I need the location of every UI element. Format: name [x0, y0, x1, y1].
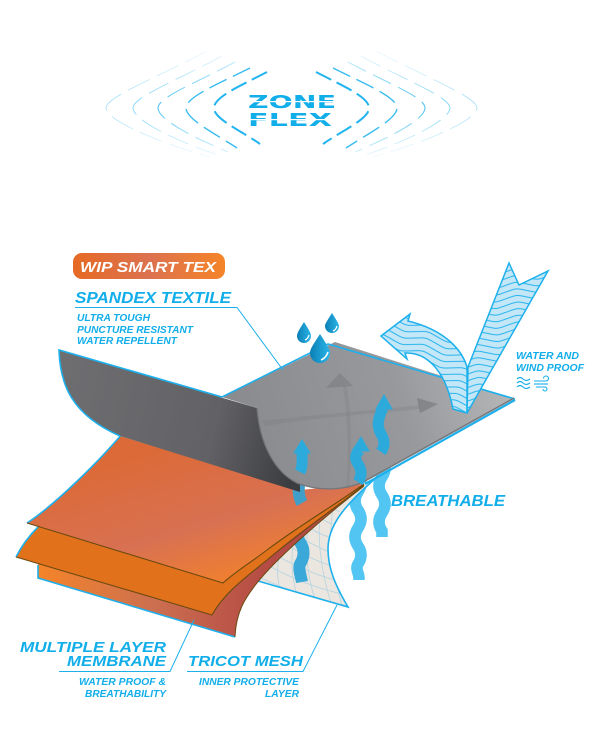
layer: tricot mesh — [255, 477, 377, 607]
logo rings left — [106, 51, 267, 157]
layer: lower membrane — [38, 486, 364, 637]
arrow: incoming arm — [467, 263, 548, 413]
label: spandex textile: SPANDEX TEXTILE — [75, 290, 232, 307]
waves below fabric — [355, 459, 385, 580]
label: multiple layer membrane: MULTIPLE LAYER — [20, 639, 166, 656]
label: tricot mesh: TRICOT MESH — [188, 653, 304, 670]
shadow arrows on sheet — [262, 373, 438, 488]
label: multiple layer membrane: BREATHABILITY — [85, 689, 167, 700]
water and wind proof arrow — [381, 263, 548, 413]
fabric layers — [16, 342, 515, 637]
arrow: middle on sheet — [352, 437, 369, 482]
logo wordmark — [246, 92, 338, 131]
arrow: horizontal shadow — [262, 398, 438, 426]
label: tricot mesh: LAYER — [265, 689, 300, 700]
label: water and wind proof: WIND PROOF — [516, 363, 585, 374]
label: multiple layer membrane: WATER PROOF & — [79, 677, 166, 688]
layer: spandex main sheet — [222, 342, 515, 489]
layer: top membrane — [27, 434, 364, 583]
water drops — [297, 313, 339, 363]
wave: under sheet right — [379, 459, 385, 537]
layer: middle membrane — [16, 485, 364, 615]
logo: zone flex — [106, 51, 477, 157]
label: spandex textile: ULTRA TOUGH — [77, 313, 151, 324]
logo rings right — [316, 51, 477, 157]
icon: water and wind — [517, 376, 548, 391]
label: spandex textile: WATER REPELLENT — [77, 336, 178, 347]
wave: under sheet centre — [355, 474, 361, 580]
arrow: vertical shadow — [326, 373, 353, 488]
label: breathable: BREATHABLE — [391, 493, 506, 510]
logo wordmark: ZONE — [248, 92, 336, 113]
badge: wip smart tex — [73, 253, 225, 279]
drop: right — [325, 313, 339, 333]
drop: front — [310, 334, 330, 363]
arrow: right on sheet — [376, 395, 392, 452]
label: spandex textile — [75, 290, 283, 370]
label: water and wind proof: WATER AND — [516, 351, 579, 362]
layer: spandex flap — [59, 350, 300, 492]
arrow: segment on membrane — [299, 480, 302, 503]
label: multiple layer membrane — [20, 620, 194, 700]
arrow: segment on mesh — [298, 526, 304, 582]
label: multiple layer membrane: MEMBRANE — [67, 653, 167, 670]
label: tricot mesh: INNER PROTECTIVE — [199, 677, 299, 688]
badge: wip smart tex: WIP SMART TEX — [80, 259, 217, 276]
label: water and wind proof — [516, 351, 585, 391]
arrow: left on sheet — [294, 440, 310, 472]
breathable arrows — [294, 395, 392, 482]
label: spandex textile: PUNCTURE RESISTANT — [77, 325, 194, 336]
logo wordmark: FLEX — [248, 110, 332, 131]
label: tricot mesh — [187, 605, 337, 700]
arrow: deflected curve — [381, 314, 467, 413]
drop: left — [297, 322, 311, 343]
